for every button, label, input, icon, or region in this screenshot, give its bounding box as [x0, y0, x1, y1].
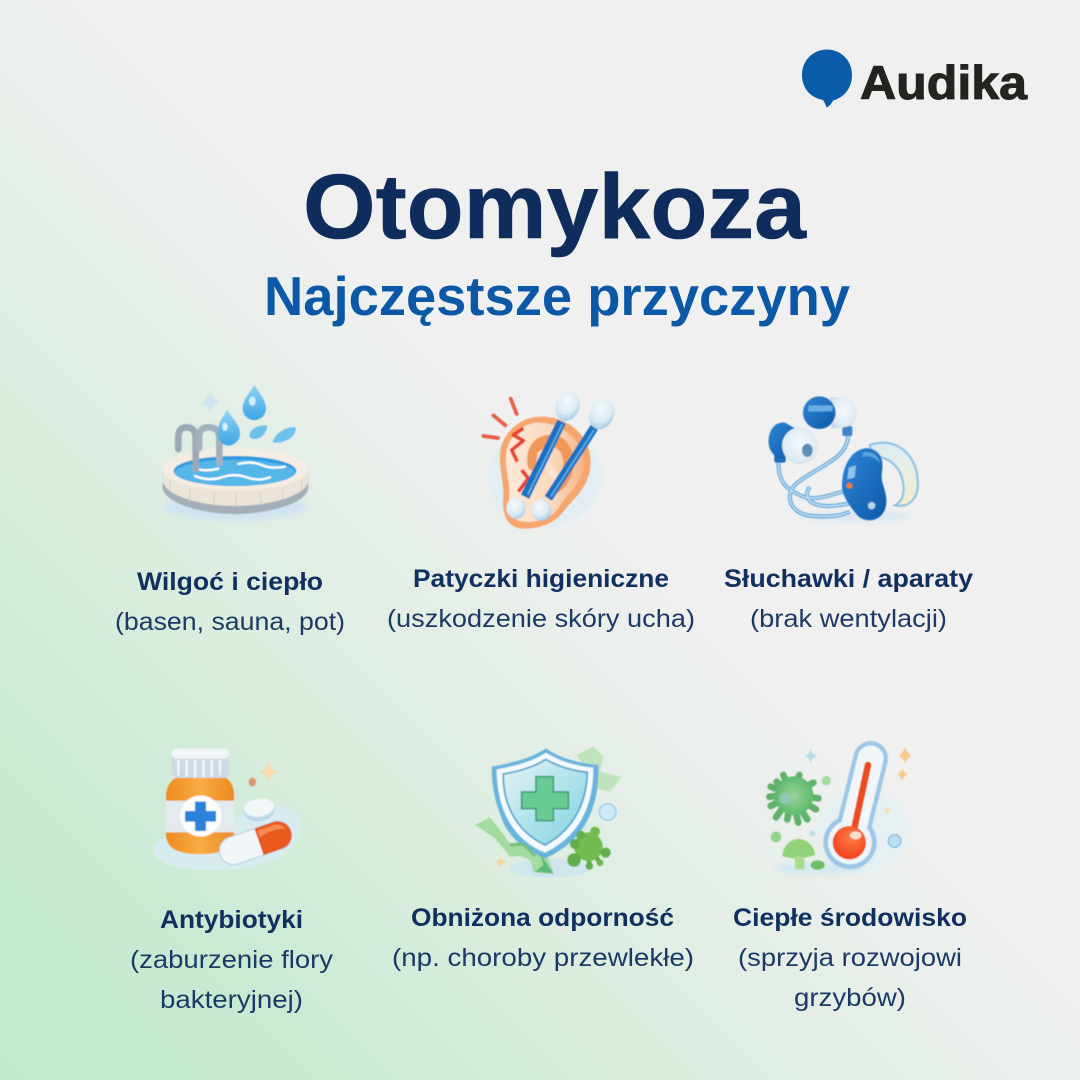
icon: ear with cotton swabs	[483, 388, 619, 529]
icon: pill bottle and capsules	[153, 749, 300, 870]
description: (basen, sauna, pot)	[115, 608, 345, 636]
heading: Obniżona odporność	[411, 904, 674, 932]
description	[738, 944, 962, 1012]
heading: Antybiotyki	[160, 906, 303, 934]
panel: antibiotics	[130, 749, 334, 1014]
panel: headphones and hearing aids	[724, 396, 973, 633]
icon: speech bubble	[802, 50, 852, 108]
description: (uszkodzenie skóry ucha)	[387, 605, 695, 633]
heading: Patyczki higieniczne	[413, 565, 669, 593]
title: Otomykoza	[303, 156, 807, 258]
description: grzybów)	[794, 984, 906, 1012]
heading: Ciepłe środowisko	[733, 904, 967, 932]
description: bakteryjnej)	[160, 986, 303, 1014]
description: (brak wentylacji)	[750, 605, 947, 633]
heading: Wilgoć i ciepło	[137, 568, 323, 596]
panel: lowered immunity	[392, 747, 694, 972]
icon: shield with cross and germ	[475, 747, 622, 878]
icon: thermometer and fungi	[769, 747, 912, 874]
subtitle: Najczęstsze przyczyny	[264, 265, 850, 327]
description: (zaburzenie flory	[130, 946, 334, 974]
description: (sprzyja rozwojowi	[738, 944, 962, 972]
icon: pool with water drops	[162, 385, 308, 520]
description: (np. choroby przewlekłe)	[392, 944, 694, 972]
icon: earbuds and hearing aid	[769, 396, 918, 522]
panel: warm environment	[733, 747, 967, 1012]
logo: Audika	[802, 50, 1028, 109]
wordmark: Audika	[860, 56, 1028, 109]
description	[130, 946, 334, 1014]
panel: cotton swabs	[387, 388, 695, 633]
heading: Słuchawki / aparaty	[724, 565, 973, 593]
panel: moisture and heat	[115, 385, 345, 636]
